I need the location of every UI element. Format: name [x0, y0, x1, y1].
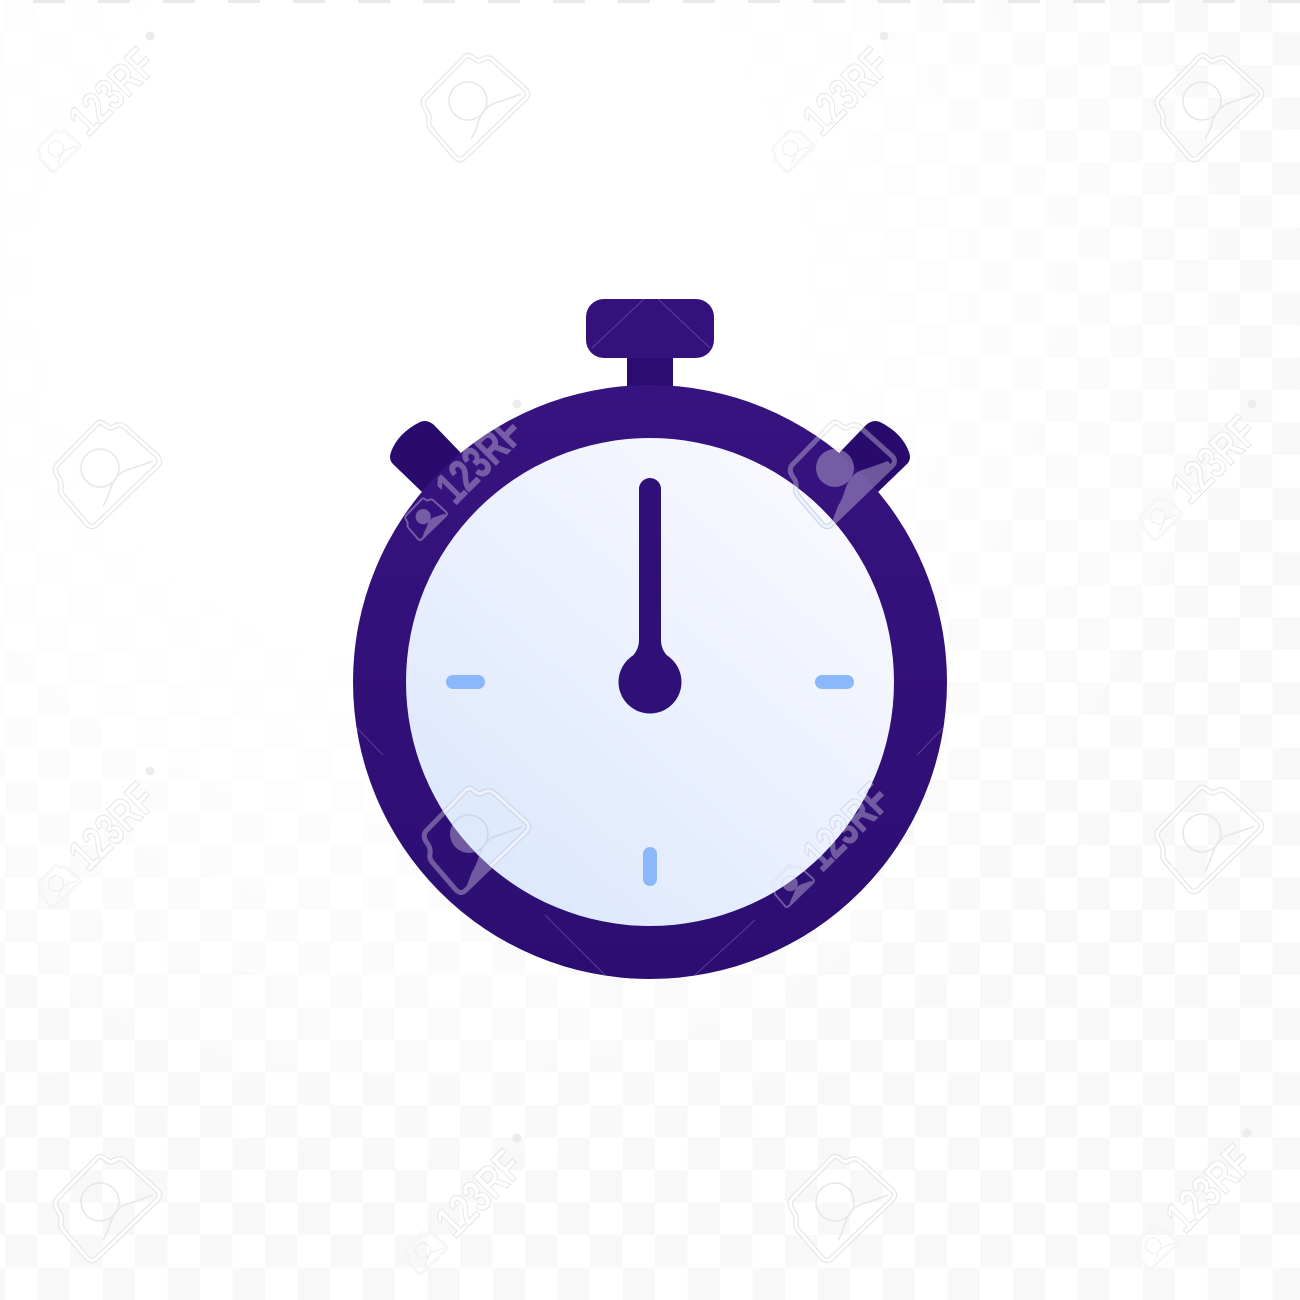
- icon: clock face: [406, 438, 894, 926]
- icon: outer ring: [353, 385, 947, 979]
- icon: left side knob: [390, 421, 470, 510]
- watermark: bottom row: 123RF: [425, 1140, 533, 1247]
- watermark: upper left on ring: 123RF: [425, 406, 533, 513]
- watermarks over clock face: 123RF: [792, 773, 900, 880]
- icon: left tick: [446, 675, 485, 689]
- watermark: second row: [55, 400, 1268, 540]
- transparency checkerboard background: [33, 0, 1300, 3]
- watermark: upper left on ring: [404, 424, 517, 541]
- watermark: top row: [38, 32, 1261, 172]
- watermark: top row: 123RF: [58, 38, 166, 145]
- icon: stopwatch: [353, 299, 947, 979]
- watermark: second row: 123RF: [1160, 406, 1268, 513]
- watermark: third row: [38, 766, 1261, 907]
- icon: clock hand: [628, 478, 672, 660]
- icon: right tick: [815, 675, 854, 689]
- watermarks over clock face: [376, 484, 872, 892]
- watermark: upper right on ring: [790, 422, 894, 526]
- watermark: top row: 123RF: [792, 38, 900, 145]
- watermarks over stopwatch ring: [405, 406, 900, 907]
- watermark: lower left on ring: [422, 810, 492, 895]
- icon: bottom tick: [643, 847, 657, 886]
- watermark: third row: 123RF: [58, 773, 166, 880]
- watermark: bottom row: [55, 1128, 1263, 1274]
- watermark: lower right on ring: [772, 773, 900, 907]
- icon: crown stem: [627, 350, 673, 392]
- watermarks over clock face: 123RF: [425, 406, 533, 513]
- watermark: bottom row: 123RF: [1155, 1135, 1263, 1242]
- watermark: lower right on ring: 123RF: [792, 773, 900, 880]
- icon: right side knob: [830, 421, 910, 510]
- icon: hand hub: [618, 650, 682, 714]
- icon: crown button: [586, 299, 714, 358]
